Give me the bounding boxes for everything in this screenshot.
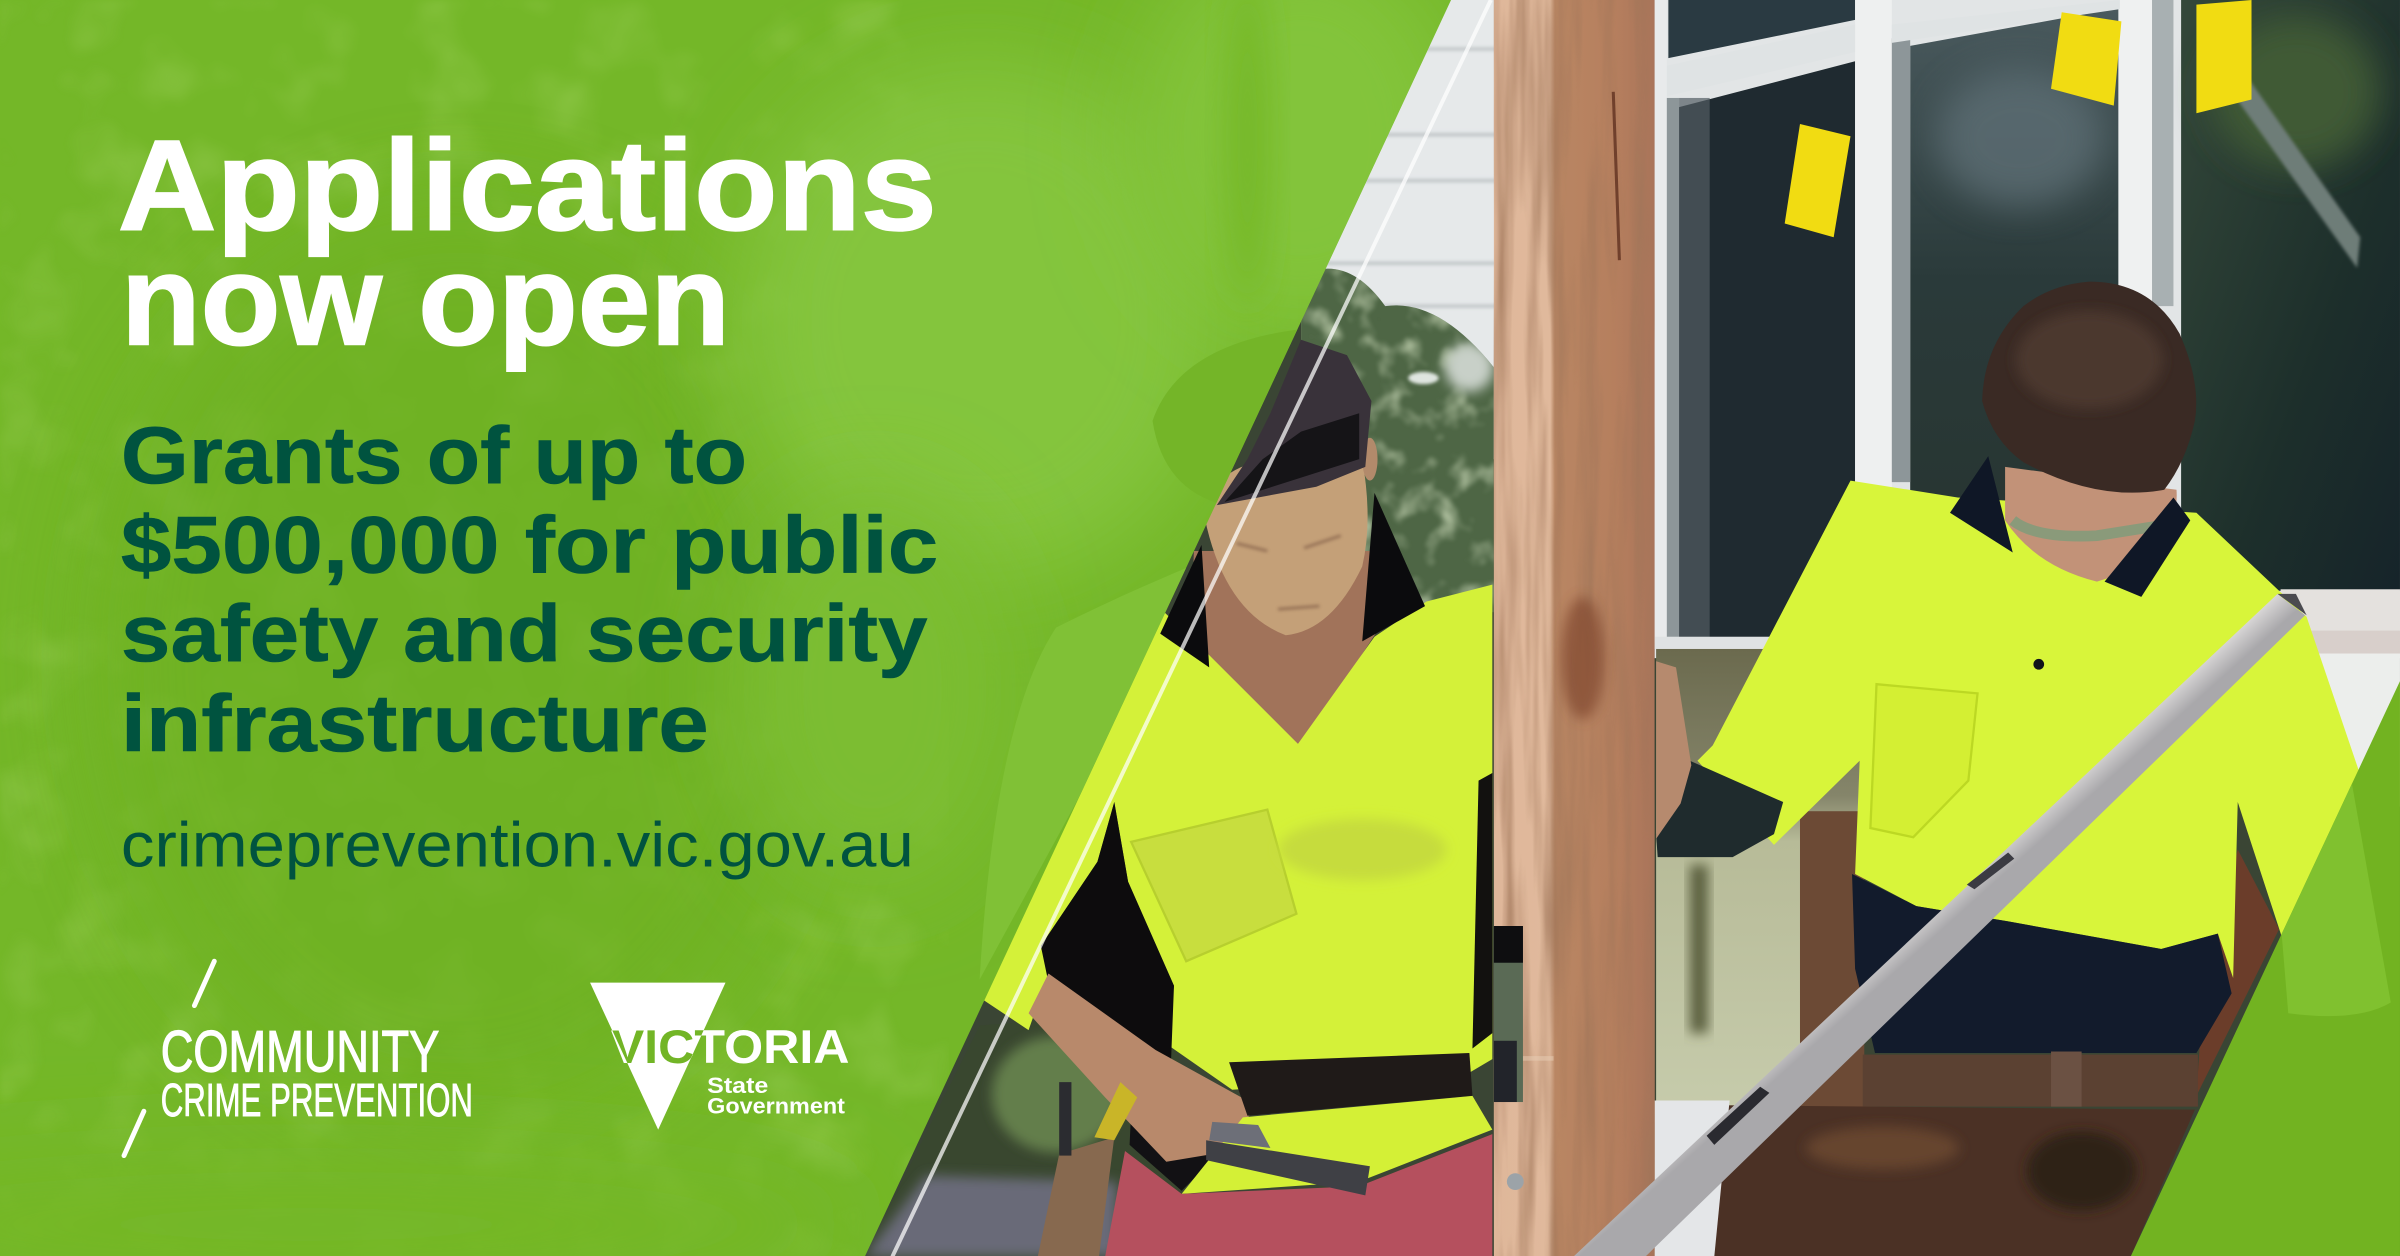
logo: community crime prevention	[124, 961, 473, 1156]
logo: victoria state government	[590, 983, 849, 1130]
logo: victoria state government: VICTORIA	[611, 1021, 849, 1074]
undershirt	[1041, 802, 1174, 1064]
ghost of cap and shirt through the overlay	[1153, 329, 1301, 505]
photo base	[857, 0, 2400, 1256]
yellow tool	[1094, 1082, 1137, 1140]
ear	[1362, 438, 1378, 481]
house siding	[1301, 0, 1500, 459]
yellow tag 1	[1785, 124, 1850, 237]
belt	[1863, 1052, 2198, 1107]
shirt dirt	[1278, 819, 1446, 880]
panel: green triangle bottom right	[2131, 681, 2400, 1256]
panel: green overlay left	[0, 0, 1469, 1256]
right worker	[1656, 282, 2365, 1107]
pants	[1105, 1134, 1492, 1256]
lower shirt	[1182, 1096, 1492, 1194]
hair	[1982, 282, 2196, 493]
subheading: grant details: safety and security	[121, 589, 928, 679]
collar left	[1950, 456, 2013, 553]
logo: victoria state government: VICTORIA	[611, 1021, 849, 1074]
collar right	[1362, 493, 1425, 641]
pocket	[1870, 684, 1978, 837]
logo: community crime prevention: COMMUNITY	[161, 1019, 439, 1084]
hair highlight	[2016, 311, 2163, 409]
logo: victoria state government: State	[707, 1073, 768, 1098]
dark waistband	[1130, 1079, 1247, 1191]
website url: crimeprevention.vic.gov.au	[121, 810, 914, 880]
notch in post	[1494, 926, 1523, 1102]
window	[1655, 0, 2400, 658]
window sill and wall right	[2281, 589, 2400, 807]
neck	[1191, 551, 1378, 750]
navy shirt band	[1852, 874, 2232, 1053]
sleeve	[1656, 761, 1783, 857]
ghost of sleeve	[2281, 770, 2391, 1016]
yellow tag 3	[2196, 0, 2252, 113]
belt	[1229, 1053, 1472, 1116]
shirt	[1697, 481, 2365, 978]
cap	[1217, 340, 1371, 505]
subheading: grant details: $500,000 for public	[121, 500, 938, 590]
title	[118, 115, 937, 372]
title: now open	[121, 229, 730, 372]
photo: construction workers	[857, 0, 2400, 1256]
pen	[1059, 1082, 1071, 1156]
white bracket	[1606, 1100, 1730, 1256]
left worker	[964, 340, 1492, 1256]
button	[2033, 659, 2044, 670]
logo: victoria state government: Government	[707, 1094, 846, 1119]
yellow tag 2	[2051, 12, 2121, 106]
title: Applications	[118, 115, 937, 258]
arm	[1029, 973, 1258, 1162]
foreground bush lower left	[865, 1010, 1179, 1256]
collar left	[1160, 545, 1209, 667]
subheading: grant details: Grants of up to	[121, 411, 747, 501]
face	[2005, 467, 2177, 582]
glasses	[2013, 520, 2173, 536]
eyes and nose shading	[1237, 536, 1341, 609]
pocket	[1131, 810, 1296, 961]
post	[1494, 0, 1655, 1256]
shirt	[964, 585, 1492, 1090]
hammer	[1206, 1122, 1370, 1195]
tool pouch	[1038, 1137, 1114, 1256]
subheading: grant details: infrastructure	[121, 679, 709, 769]
logo: community crime prevention: CRIME PREVENTION	[161, 1074, 473, 1126]
concrete wall behind right worker	[1656, 649, 2279, 1110]
shirt shade	[1859, 704, 1861, 761]
spirit level	[1573, 594, 2307, 1256]
collar right	[2105, 497, 2190, 597]
foliage behind left worker	[1301, 245, 1500, 612]
diagonal white line	[892, 0, 1491, 1256]
hand	[1656, 661, 1691, 839]
subheading: grant details	[121, 411, 938, 769]
timber beam	[1711, 1105, 2195, 1256]
face	[1205, 459, 1368, 635]
